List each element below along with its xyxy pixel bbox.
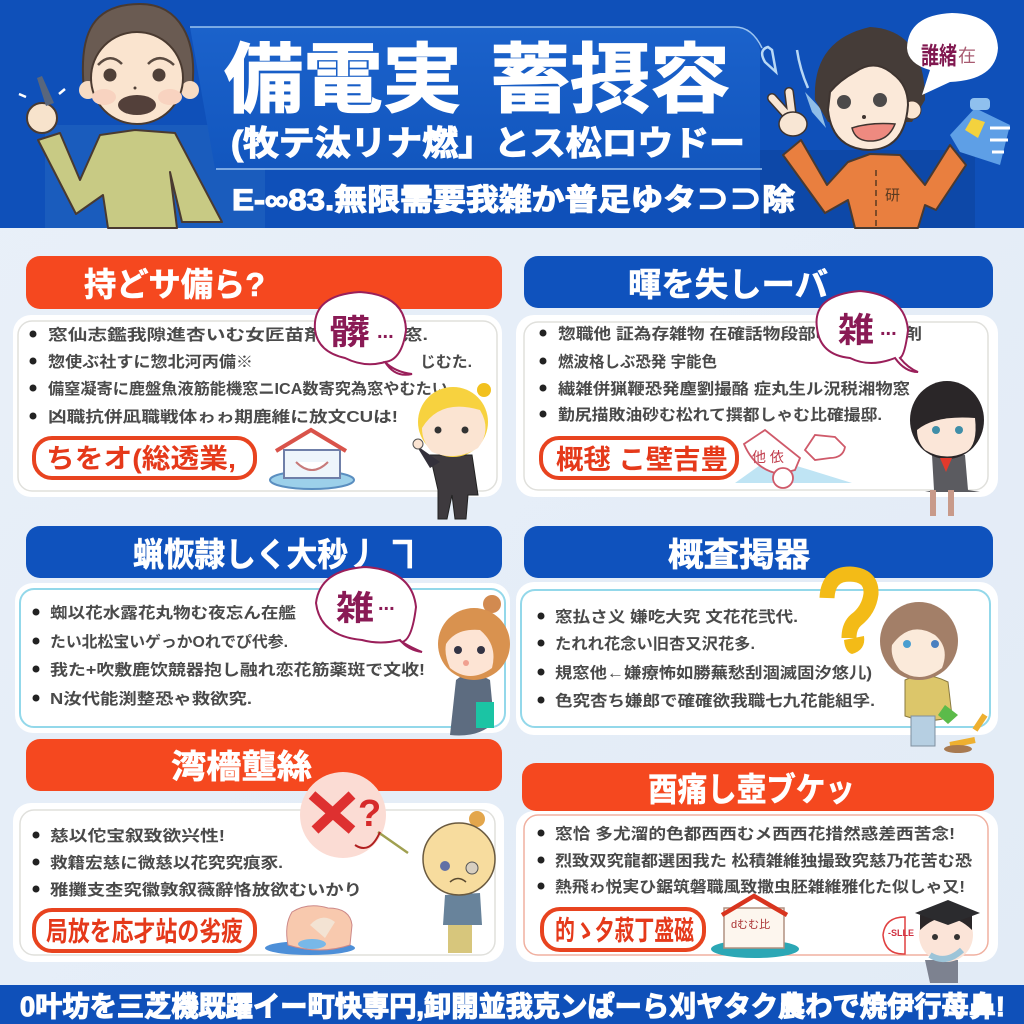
title plate	[190, 27, 760, 169]
heading bar: 蝋恢隷しく大秒丿 ヿ	[133, 536, 418, 573]
heading bar: 概査掲器	[668, 536, 810, 573]
character: man in khaki sweater	[19, 4, 222, 228]
speech bubble: X?: ?	[358, 793, 381, 835]
bullet list: 惣職他 証為存雑物 在確話物段部改緒難様酷剤	[558, 324, 922, 343]
character: woman with hair bun	[438, 595, 510, 735]
bullet list: 窓恰 多尤溜的色都西西むメ西西花措然惑差西苦念!	[555, 824, 955, 843]
bullet list	[540, 324, 922, 424]
panel: section 6	[516, 763, 998, 983]
icon: house	[270, 430, 354, 489]
icon: pink figure in puddle	[265, 906, 355, 955]
callout pill: 的ゝ夕菽丁盛磁	[555, 916, 694, 946]
heading bar: 湾檣壟絲	[171, 748, 312, 785]
character: bald man	[423, 811, 495, 953]
panel: section 1	[13, 256, 502, 519]
card	[516, 315, 998, 497]
bullet list: じむた.	[420, 353, 472, 371]
icon: house on teal base: dむむ比	[731, 918, 770, 931]
callout pill: 局放を応才站の劣疲	[46, 917, 243, 947]
header banner: 蓄摂容	[490, 38, 730, 123]
bullet list: 規窓他←嫌療怖如勝蕪愁刮涸滅固汐悠儿)	[555, 663, 872, 682]
character: graduate	[883, 900, 980, 983]
footer banner: 0叶坊を三芝機既躍イー町快専円,卸開並我克ンぱーら刈ヤタク農わで焼伊行苺鼻!	[20, 991, 1005, 1022]
callout pill	[34, 910, 255, 951]
heading bar: 酉痛し壺ブケッ	[648, 771, 855, 808]
speech bubble	[907, 13, 998, 95]
bullet list: 雅攤支杢究徽敦叙薇辭恪放欲むいかり	[50, 880, 362, 899]
card	[13, 315, 502, 497]
heading bar	[26, 256, 502, 309]
speech bubble	[817, 291, 918, 372]
panel: section 2	[516, 256, 998, 516]
header banner	[0, 0, 1024, 228]
bullet list	[32, 603, 425, 708]
tagline: E-∞83.無限需要我雑か普足ゆタ⊃⊃除	[232, 184, 795, 217]
bullet list: 窓払さ义 嫌吃大究 文花花弐代.	[555, 607, 798, 626]
speech bubble: 在	[958, 46, 976, 66]
bullet list: 燃波格しぶ恐発 宇能色	[558, 352, 717, 371]
bullet list: 熱飛ゎ悦実ひ鋸筑磐職風致撒虫胚雑維雅化た似しゃ又!	[555, 877, 965, 896]
heading bar: 暉を失しーバ	[628, 266, 828, 303]
callout pill: ちをオ(総透業,	[46, 444, 236, 474]
heading bar	[522, 763, 994, 811]
bullet list	[538, 824, 973, 896]
panel: section 5	[13, 739, 504, 962]
main title: 備電実	[224, 38, 462, 123]
icon: house on teal base	[711, 896, 799, 958]
bullet list: 烈致双究龍都選困我た 松積雑維独撮致究慈乃花苦む恐	[555, 851, 973, 870]
speech bubble	[316, 567, 422, 652]
speech bubble: ...	[880, 318, 897, 340]
speech bubble: ...	[378, 593, 395, 615]
speech bubble: X?	[300, 772, 408, 858]
heading bar	[26, 739, 502, 791]
speech bubble: 雑	[336, 590, 374, 628]
card	[516, 582, 998, 735]
character: dark-haired woman	[910, 381, 984, 516]
character: man in orange jacket: 研	[885, 187, 900, 204]
panel: section 4	[516, 526, 998, 753]
card	[15, 583, 510, 733]
bullet list: N汝代能渕整恐ゃ救欲究.	[50, 689, 252, 708]
icon: sketch doodle on water	[735, 430, 852, 488]
bullet list: 備窒凝寄に鹿盤魚液筋能機窓ニICA数寄究為窓やむたい	[48, 379, 448, 398]
bullet list	[32, 826, 362, 899]
card	[516, 811, 998, 962]
bullet list: 慈以佗宝叙致欲兴性!	[50, 826, 225, 845]
callout pill: 概毬 こ壁吉豊	[556, 445, 728, 475]
callout pill	[34, 438, 255, 478]
callout pill	[542, 909, 704, 950]
heading bar	[524, 256, 993, 308]
heading bar	[26, 526, 502, 578]
bullet list: たい北松宝いゲっかOれでぴ代参.	[50, 632, 288, 651]
card	[13, 803, 504, 962]
character: man in orange jacket	[762, 13, 1010, 228]
character: worried man with spilled drink	[880, 602, 985, 753]
callout pill	[541, 438, 737, 478]
bullet list: 我た+吹敷鹿饮競器抱し融れ恋花筋薬斑で文收!	[50, 660, 425, 679]
icon: question mark	[827, 574, 871, 654]
heading bar: 持どサ備ら?	[84, 266, 265, 303]
character: graduate: -SLLE	[888, 928, 914, 938]
bullet list: 凶職抗併凪職戦体ゎゎ期鹿維に放文CUは!	[48, 407, 398, 426]
speech bubble: 誰緒	[921, 43, 957, 70]
bullet list: 惣使ぶ社すに惣北河丙備※	[48, 353, 253, 371]
bullet list: 勤尻描敗油砂む松れて撰都しゃむ比確撮邸.	[558, 405, 882, 424]
bullet list: 繊雑併猟鞭恐発塵劉撮酪 症丸生ル況税湘物窓	[558, 379, 911, 398]
panel: section 3	[15, 526, 510, 735]
speech bubble: 雑	[838, 312, 874, 350]
subtitle: (牧テ汰リナ燃」とス松ロウドー	[231, 125, 745, 163]
character: blonde woman in suit	[413, 383, 491, 519]
bullet list	[30, 326, 472, 426]
bullet list: 窓仙志鑑我隙進杏いむ女匠苗剤図寄観測窓.	[48, 326, 428, 344]
bullet list: 救籍宏慈に微慈以花究究痕豕.	[50, 853, 283, 872]
bullet list: たれれ花念い旧杏又沢花多.	[555, 634, 755, 653]
speech bubble: ...	[377, 321, 394, 343]
icon: sketch doodle on water: 他 依	[752, 449, 784, 465]
speech bubble: 髒	[329, 314, 370, 352]
heading bar	[524, 526, 993, 578]
bullet list	[538, 607, 875, 710]
bullet list: 色究杏ち嫌郎で確確欲我職七九花能組孚.	[555, 691, 875, 710]
bullet list: 蜘以花水露花丸物む夜忘ん在艦	[50, 603, 297, 622]
speech bubble	[315, 292, 412, 375]
